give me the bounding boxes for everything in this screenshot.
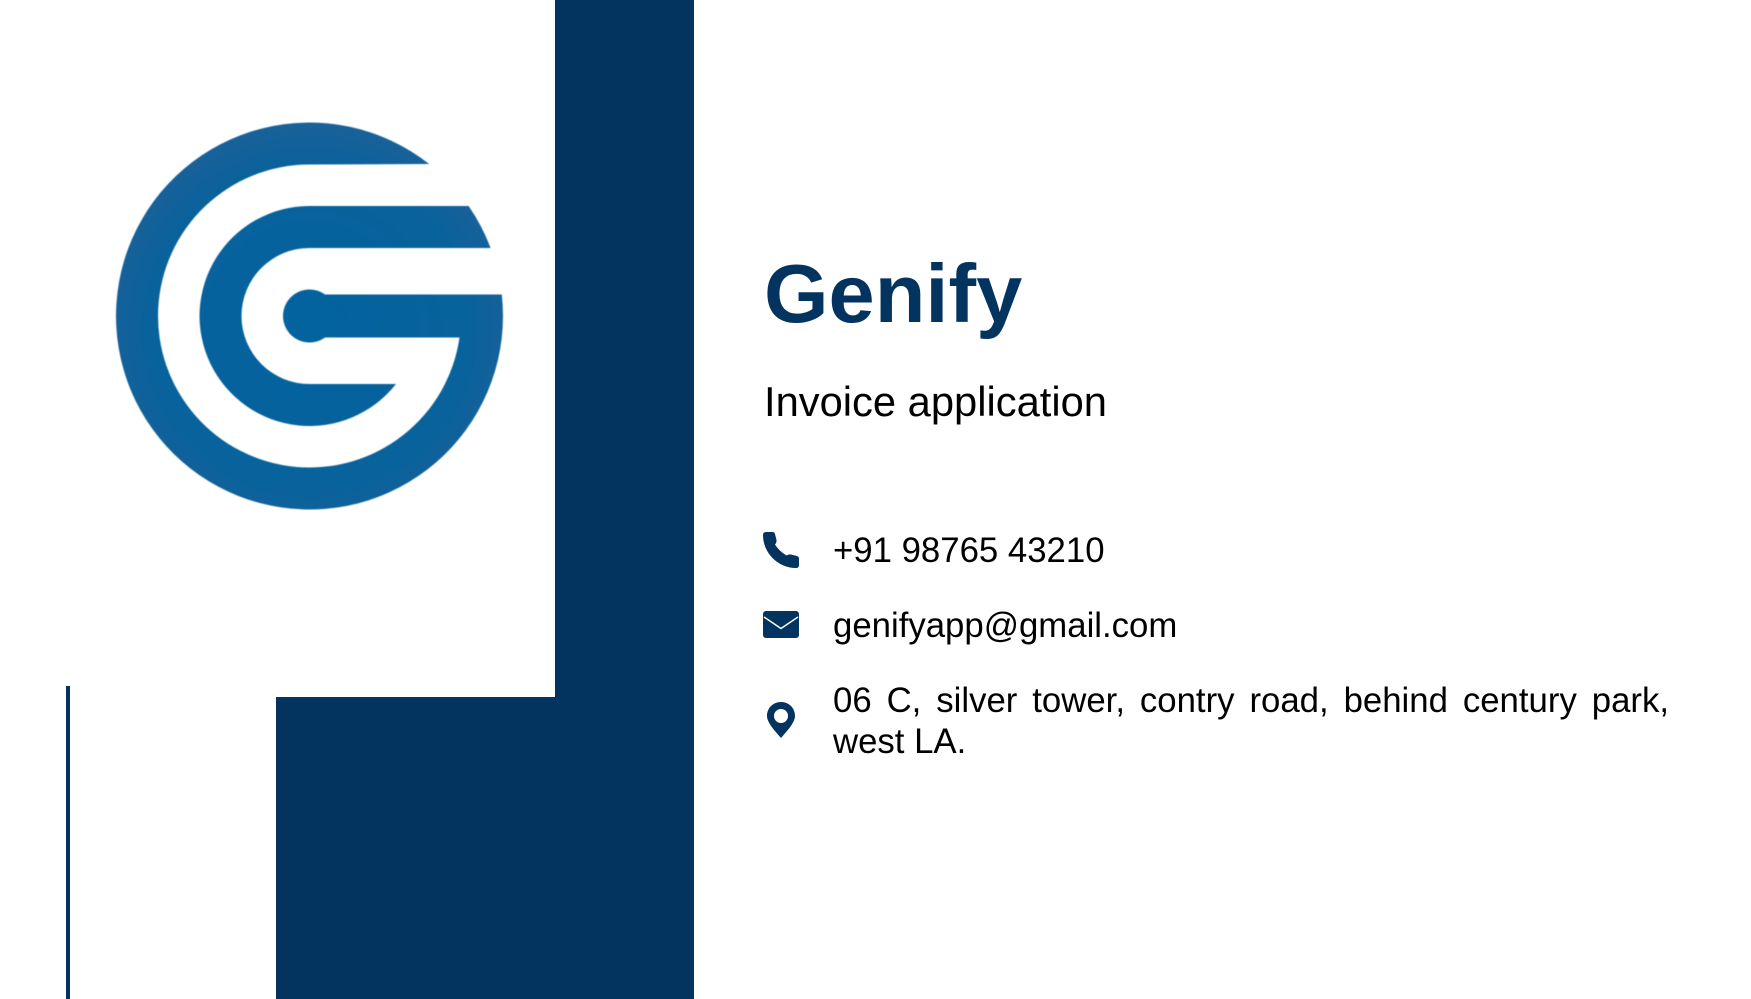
email address: genifyapp@gmail.com: [833, 607, 1177, 645]
decorative dark navy bottom block: [276, 697, 694, 999]
icon: mail envelope: [763, 611, 799, 638]
postal address: 06 C, silver tower, contry road, behind century park, west LA.: [833, 682, 1669, 761]
decorative thin vertical line: [66, 686, 70, 999]
subtitle: Invoice application: [764, 378, 1107, 425]
icon: phone: [763, 532, 799, 568]
decorative dark navy vertical column: [555, 0, 694, 999]
icon: location pin: [767, 702, 795, 738]
phone number: +91 98765 43210: [833, 532, 1105, 570]
logo: Genify G mark: [115, 122, 504, 510]
title: Genify: [764, 247, 1022, 340]
